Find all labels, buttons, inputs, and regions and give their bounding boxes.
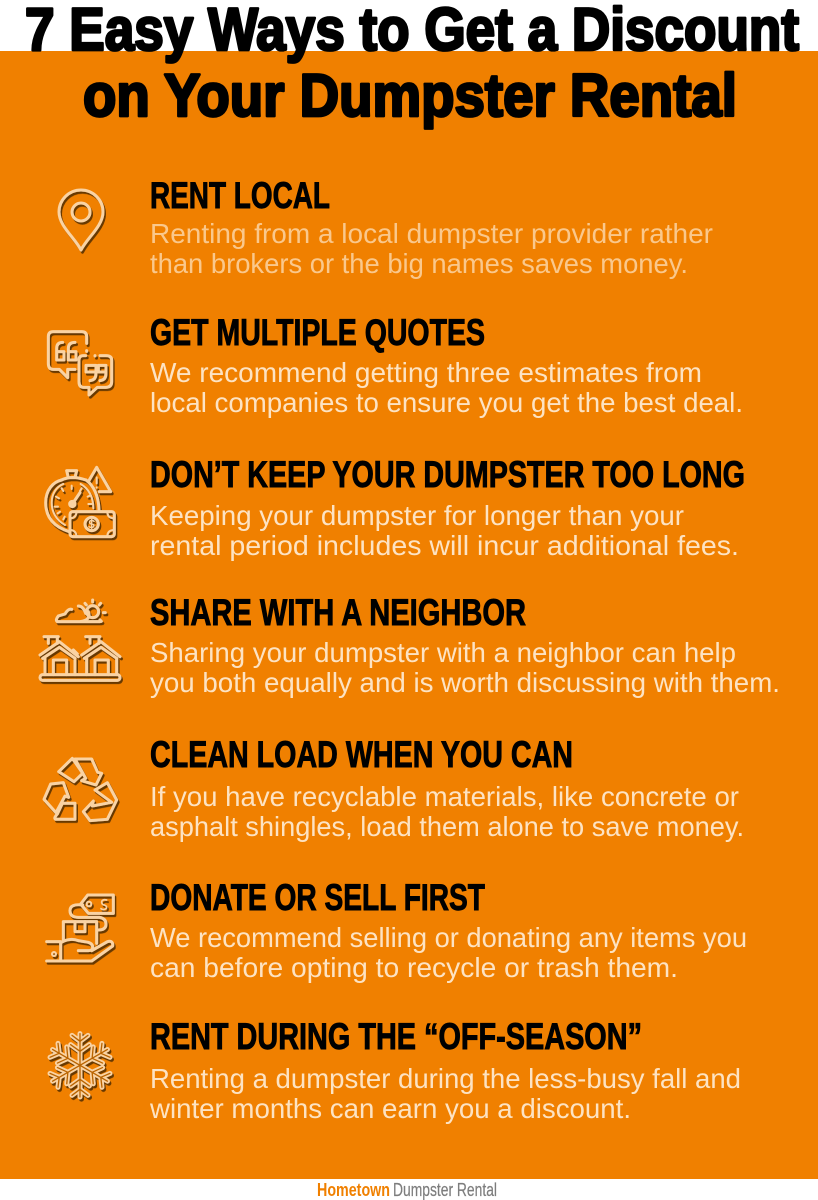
text block: Sharing your dumpster with a neighbor can help	[150, 637, 736, 668]
text block: We recommend getting three estimates from	[150, 357, 702, 388]
text block	[150, 500, 739, 561]
text block	[150, 637, 780, 698]
text block: Keeping your dumpster for longer than your	[150, 500, 684, 531]
panel: donate or sell first	[47, 877, 747, 983]
heading: DONATE OR SELL FIRST	[150, 877, 485, 918]
icon: two houses with cloud and sun	[40, 600, 120, 680]
text block	[150, 781, 744, 842]
text block: rental period includes will incur additional fees.	[150, 530, 739, 561]
panel: rent local	[59, 175, 713, 279]
text block: Renting a dumpster during the less-busy fall and	[150, 1063, 741, 1094]
icon: hand with box and price tag	[47, 895, 113, 961]
panel: clean load when you can	[44, 734, 744, 842]
footer logo: Dumpster Rental	[393, 1180, 497, 1200]
heading: RENT LOCAL	[150, 175, 330, 216]
panel: share with a neighbor	[40, 592, 780, 698]
text block: Renting from a local dumpster provider rather	[150, 218, 713, 249]
heading: GET MULTIPLE QUOTES	[150, 312, 485, 353]
text block	[150, 922, 747, 983]
footer logo	[317, 1180, 497, 1200]
panel: rent during the off-season	[48, 1016, 741, 1124]
text block	[149, 1063, 741, 1124]
icon: quote bubbles	[48, 332, 112, 395]
heading: SHARE WITH A NEIGHBOR	[150, 592, 526, 633]
footer logo: Hometown	[317, 1180, 390, 1200]
text block: local companies to ensure you get the best deal.	[150, 387, 743, 418]
icon: stopwatch with warning and money	[46, 467, 114, 537]
heading: CLEAN LOAD WHEN YOU CAN	[150, 734, 573, 775]
text block: winter months can earn you a discount.	[149, 1093, 631, 1124]
text block	[150, 357, 743, 418]
heading: RENT DURING THE “OFF-SEASON”	[150, 1016, 642, 1057]
icon: location pin	[59, 190, 103, 250]
text block: If you have recyclable materials, like concrete or	[150, 781, 739, 812]
text block: asphalt shingles, load them alone to save money.	[150, 811, 744, 842]
panel: don't keep your dumpster too long	[46, 454, 745, 561]
panel: get multiple quotes	[48, 312, 743, 418]
text block: We recommend selling or donating any items you	[150, 922, 747, 953]
text block: you both equally and is worth discussing with them.	[150, 667, 780, 698]
title: on Your Dumpster Rental	[83, 62, 737, 129]
title	[25, 0, 799, 129]
icon: snowflake	[48, 1034, 112, 1097]
icon: recycle arrows	[44, 758, 117, 821]
text block: than brokers or the big names saves money.	[150, 248, 688, 279]
text block: can before opting to recycle or trash them.	[150, 952, 678, 983]
text block	[150, 218, 713, 279]
